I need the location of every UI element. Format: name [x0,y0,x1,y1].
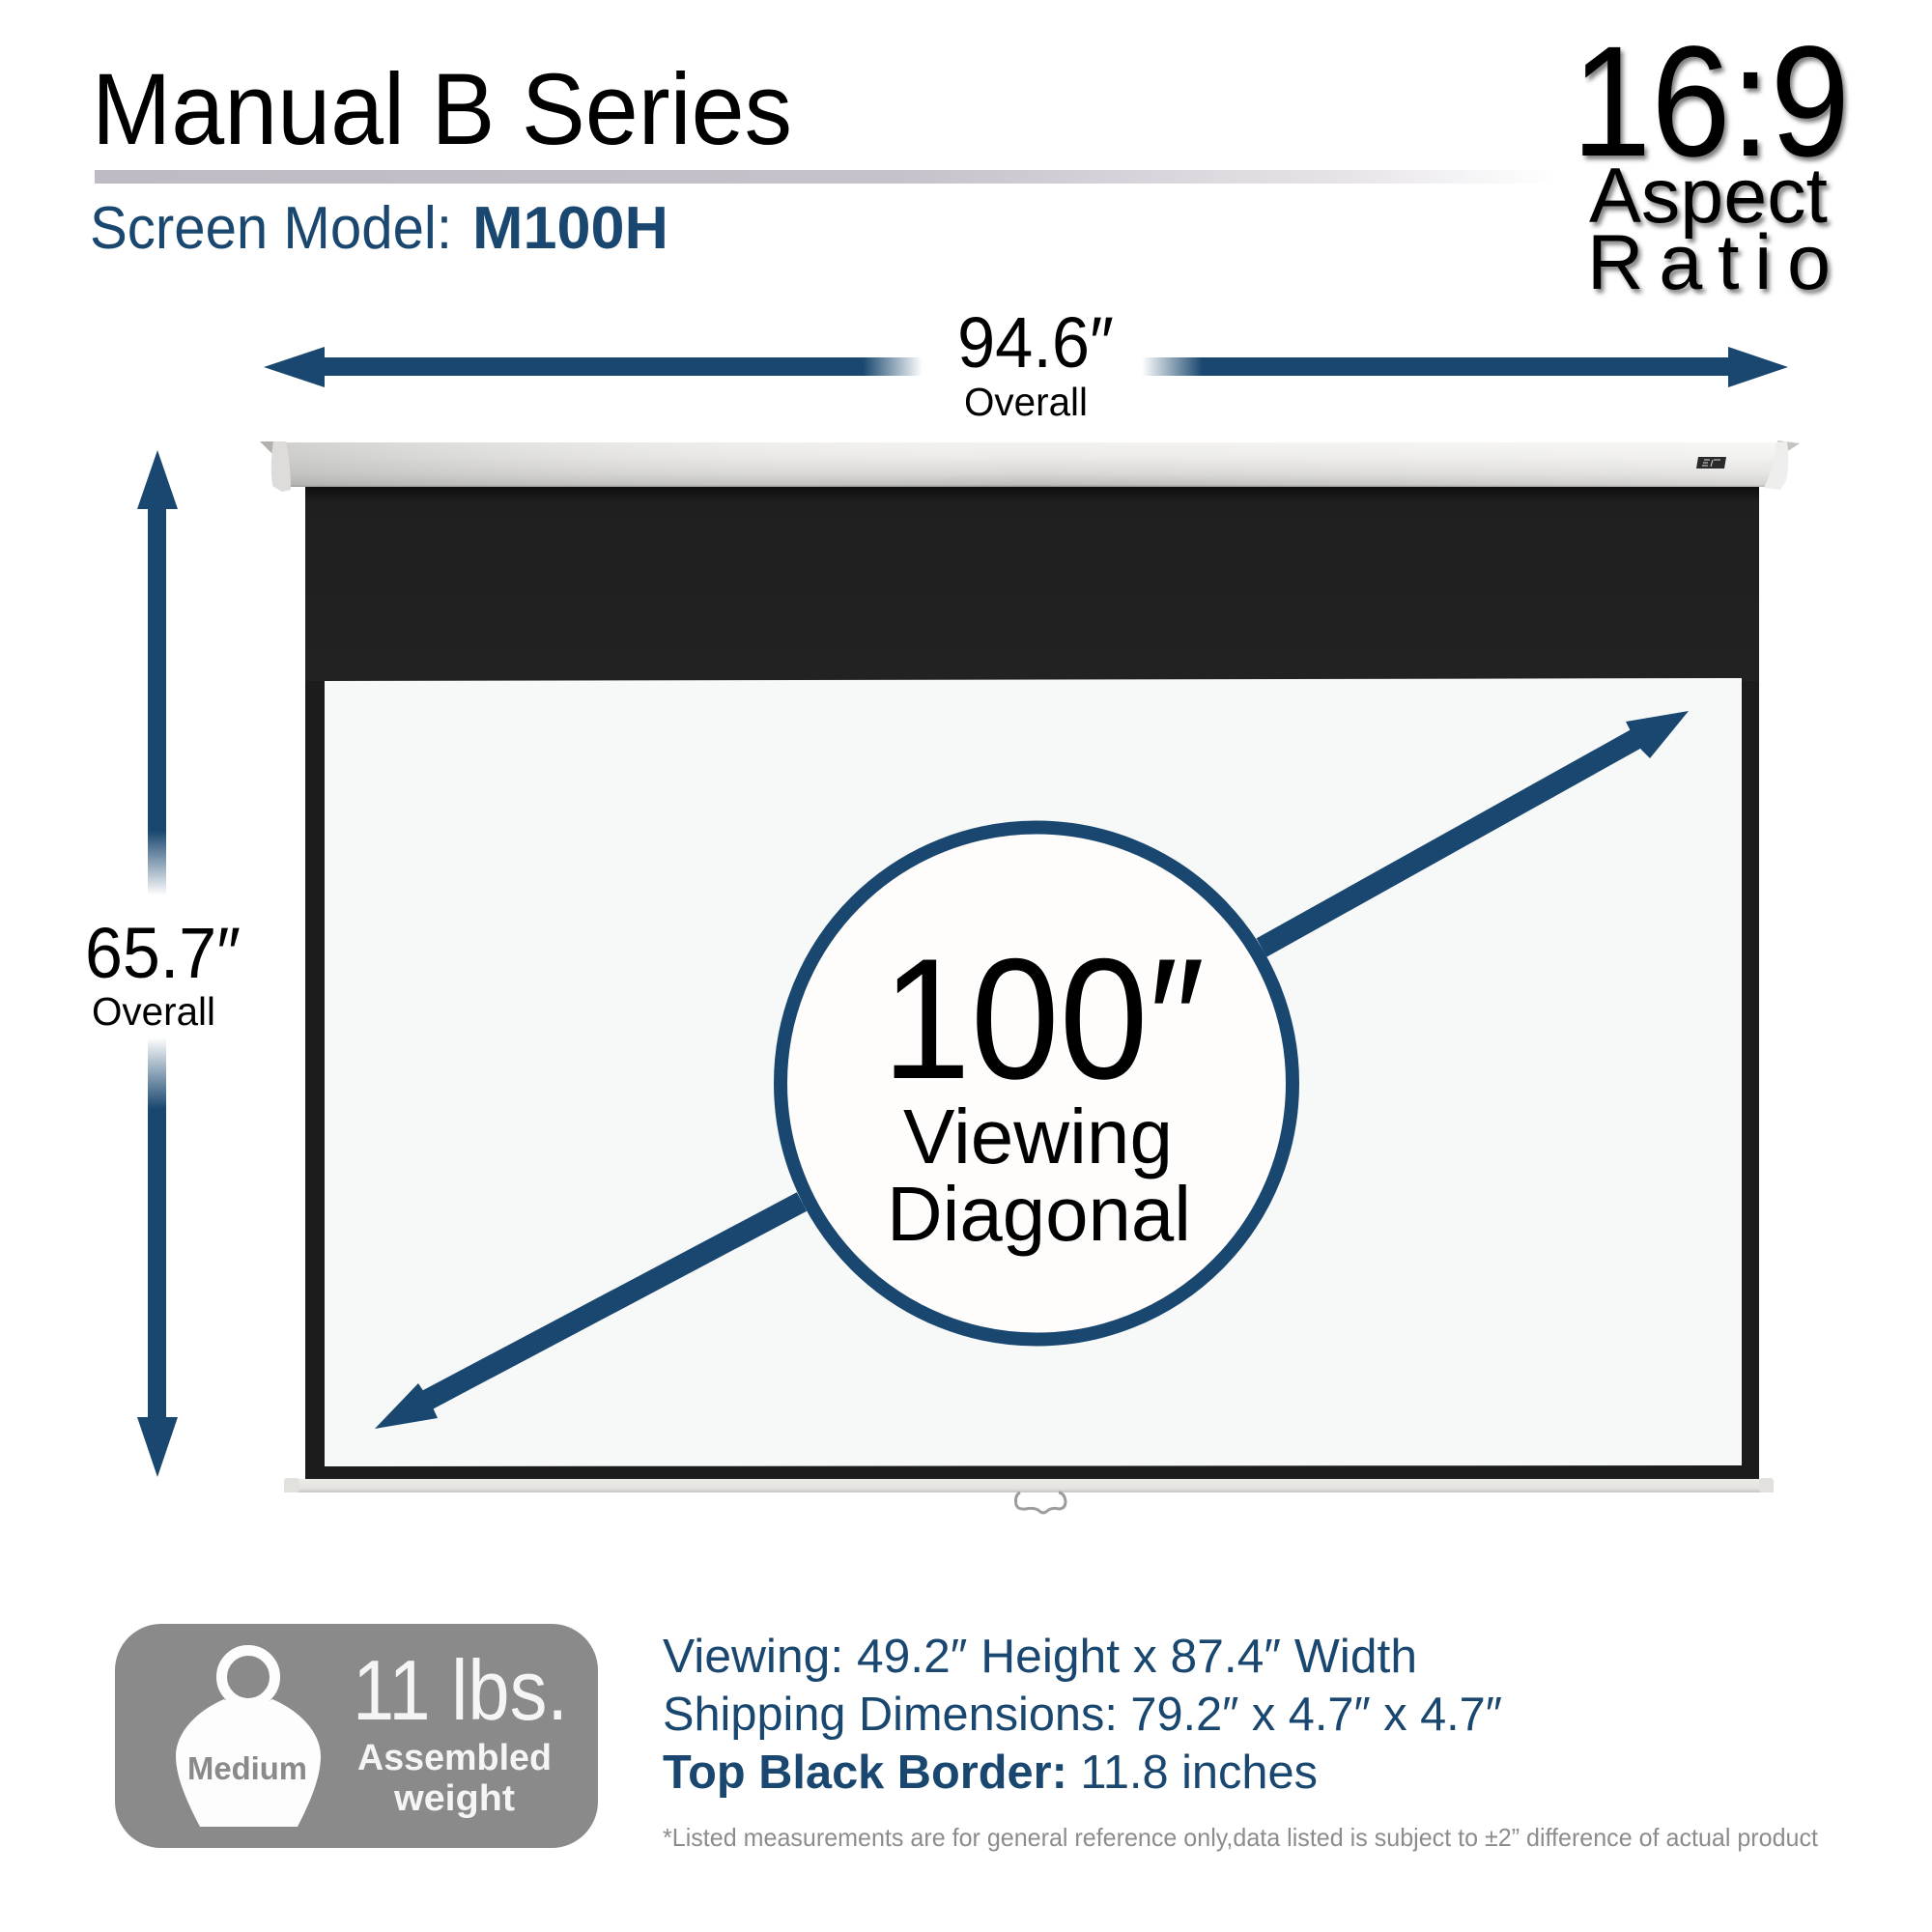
lower arm [375,1202,802,1429]
aspect ratio badge: Ratio [1587,219,1831,306]
width arrow [264,347,1788,387]
pull handle [1016,1492,1065,1513]
weight panel [115,1624,598,1848]
brand logo [1696,457,1726,469]
title rule [95,170,1555,184]
screen model [90,195,668,262]
diagonal size: 100″ [882,923,1205,1115]
top black border [305,487,1759,681]
weight value: 11 lbs. [353,1642,568,1738]
specifications: Top Black Border: 11.8 inches [663,1747,1318,1799]
specifications: Shipping Dimensions: 79.2″ x 4.7″ x 4.7″ [663,1689,1502,1741]
weight caption: Assembled [357,1738,552,1778]
white viewing surface [325,678,1742,1466]
viewing diagonal arrow [375,711,1689,1429]
width label [957,302,1114,424]
bottom bar [284,1478,1774,1492]
diagonal caption [887,1094,1191,1257]
aspect ratio badge [1572,13,1850,306]
black screen cloth [305,483,1759,1479]
diagonal size circle [781,827,1293,1339]
specifications [663,1631,1502,1799]
weight caption: weight [393,1778,515,1819]
weight caption [357,1738,552,1819]
diagonal caption: Diagonal [887,1171,1191,1257]
title: Manual B Series [92,53,792,166]
projector screen [260,440,1800,1513]
aspect ratio badge: Aspect [1589,153,1828,240]
upper arm [1262,711,1689,948]
diagonal caption: Viewing [903,1094,1173,1179]
icon: weight: Medium [187,1750,307,1786]
icon: weight [176,1650,321,1827]
roller case [260,440,1800,492]
height arrow [137,450,178,1477]
height label [85,913,241,1034]
width label: Overall [964,380,1088,424]
disclaimer: *Listed measurements are for general reference only,data listed is subject to ±2” difference of actual product [663,1823,1819,1852]
screen model: M100H [472,195,668,262]
width label: 94.6″ [957,302,1114,383]
specifications: Viewing: 49.2″ Height x 87.4″ Width [663,1631,1417,1683]
screen model: Screen Model: [90,195,452,262]
height label: Overall [92,989,215,1034]
aspect ratio badge: 16:9 [1572,13,1850,189]
height label: 65.7″ [85,913,241,993]
